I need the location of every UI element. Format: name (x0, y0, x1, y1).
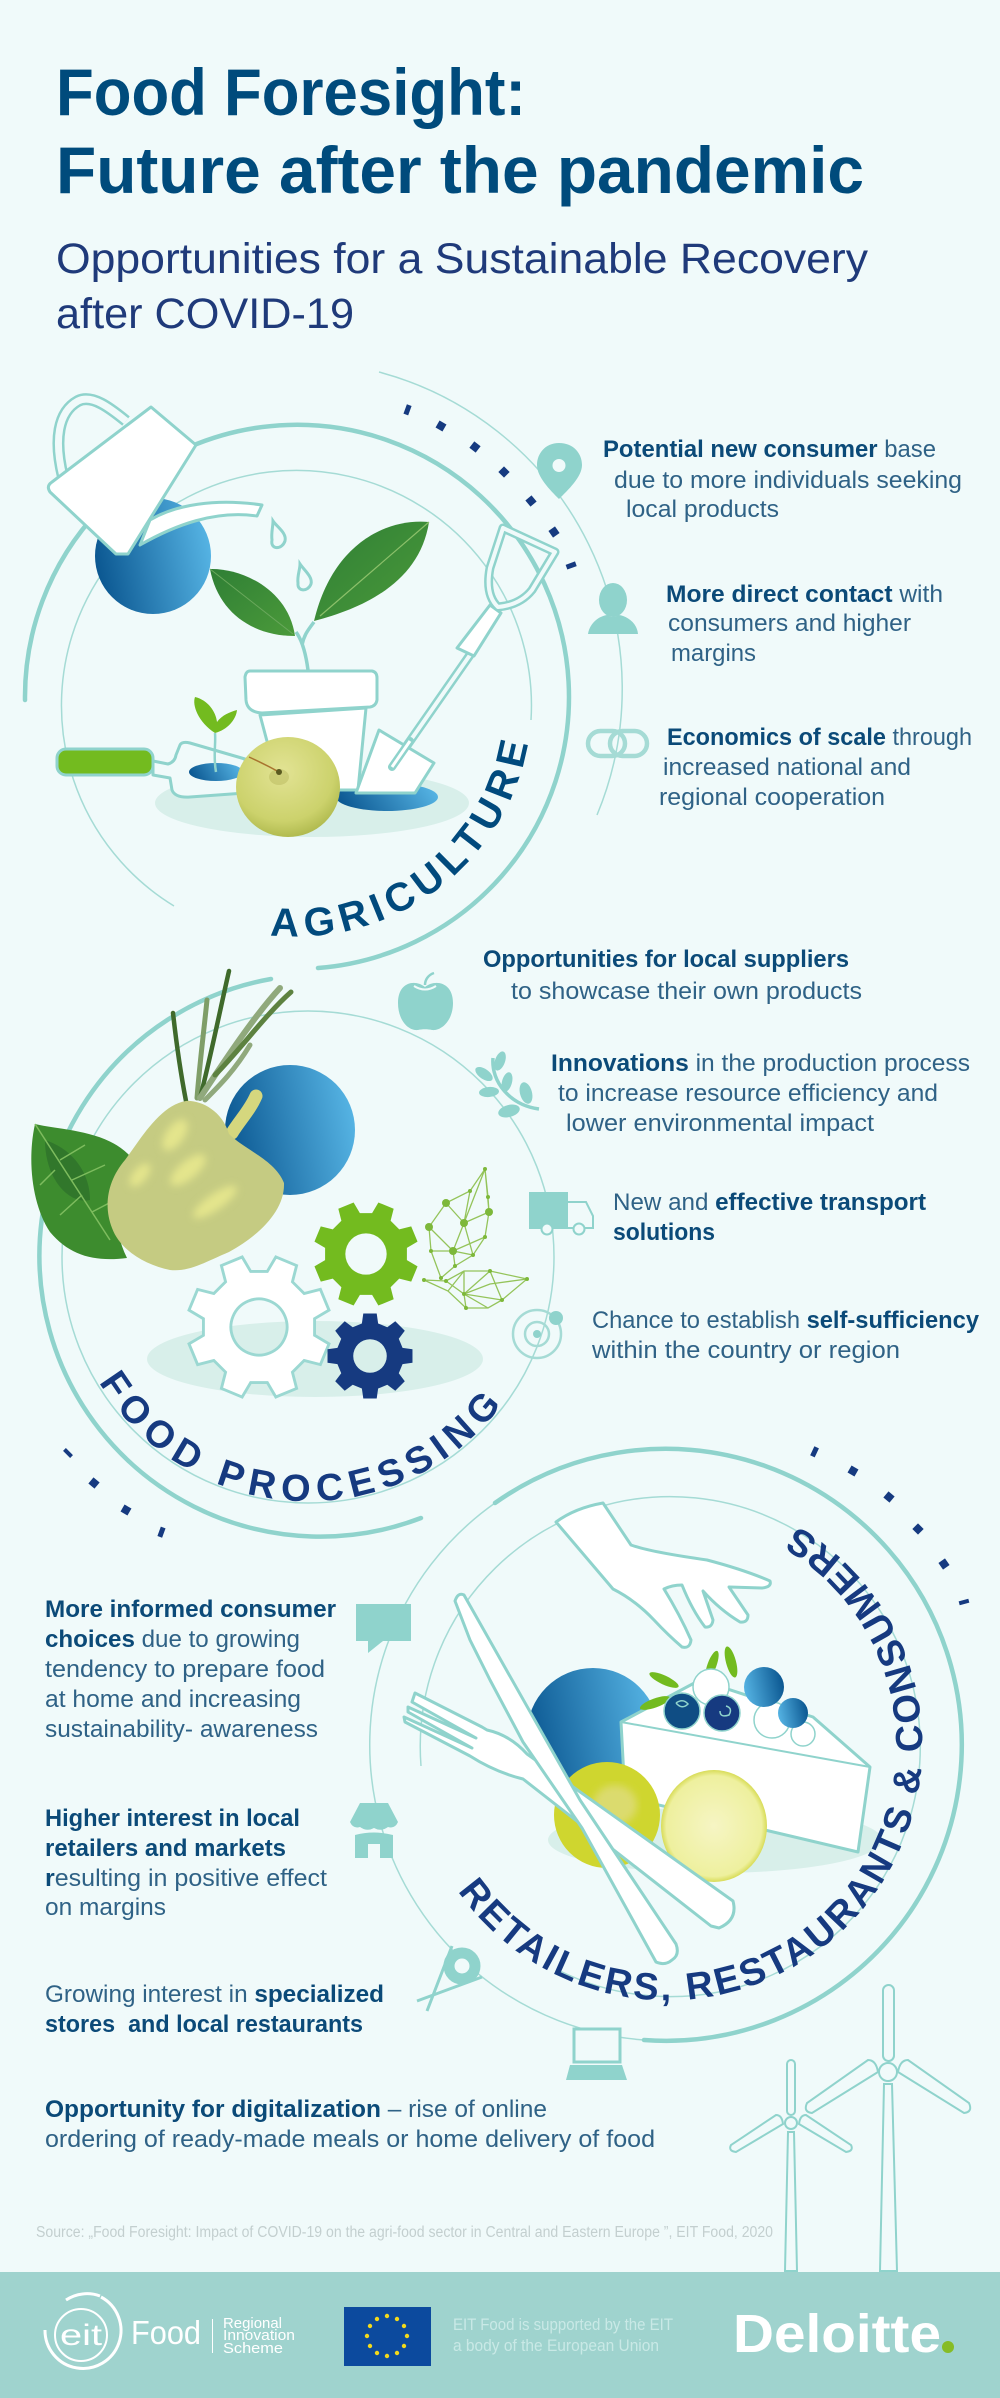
text: local retailers: retailers and markets (45, 1835, 286, 1862)
funding statement: a body of the European Union (453, 2336, 659, 2355)
hand (556, 1503, 770, 1647)
text: innovations: Innovations in the production process (551, 1050, 970, 1077)
text: specialized stores: stores and local restaurants (45, 2011, 363, 2038)
text: economics of scale: Economics of scale through (667, 724, 972, 751)
text: informed consumer choices (45, 1596, 336, 1743)
cake slice (621, 1680, 870, 1852)
text: digitalization: Opportunity for digitalization – rise of online (45, 2096, 547, 2123)
wind turbines (730, 1985, 970, 2271)
text: new consumer base: due to more individuals seeking (614, 467, 962, 494)
text: innovations (551, 1050, 970, 1137)
shadow ellipse (147, 1321, 483, 1397)
icon: person (588, 583, 638, 634)
funding statement (453, 2315, 673, 2355)
text: informed consumer choices: tendency to prepare food (45, 1656, 325, 1683)
footer band (0, 2272, 1000, 2398)
logo: EIT Food: Regional (223, 2315, 282, 2332)
source note: Source: „Food Foresight: Impact of COVID-19 on the agri-food sector in Central and Eastern Europe ”, EIT Food, 2020 (36, 2224, 773, 2241)
digital network leaves (422, 1167, 529, 1310)
text: local retailers: Higher interest in local (45, 1805, 300, 1832)
gears (166, 1186, 434, 1420)
text: direct contact: More direct contact with (666, 581, 943, 608)
logo: EIT Food: eit (60, 2319, 103, 2352)
agriculture dotted arc (403, 404, 577, 570)
heading: agriculture: AGRICULTURE (270, 740, 528, 937)
text: self-sufficiency: within the country or region (591, 1337, 900, 1364)
text: informed consumer choices: More informed consumer (45, 1596, 336, 1623)
title: Future after the pandemic (56, 133, 864, 207)
processing text list (398, 946, 980, 1364)
text: direct contact: consumers and higher (668, 610, 911, 637)
title (56, 55, 864, 207)
retailers rings (370, 1449, 962, 2041)
text: self-sufficiency: Chance to establish self-sufficiency (592, 1307, 980, 1334)
small turbine (730, 2060, 852, 2271)
panel: agriculture (22, 371, 623, 970)
title: Food Foresight: (56, 55, 526, 129)
text: economics of scale: regional cooperation (659, 784, 885, 811)
water drops (272, 521, 311, 590)
agriculture text list (537, 436, 972, 811)
icon: chain link (588, 731, 647, 756)
subtitle: after COVID-19 (56, 290, 354, 338)
trowel with green handle (57, 742, 245, 797)
logo: EIT Food: Scheme (223, 2340, 283, 2357)
retailers text list (45, 1596, 655, 2153)
icon: apple (398, 973, 453, 1030)
logo: EIT Food (45, 2294, 295, 2368)
heading: retailers, restaurants and consumers: RETAILERS, RESTAURANTS & CONSUMERS (459, 1530, 922, 2006)
subtitle: Opportunities for a Sustainable Recovery (56, 235, 869, 283)
text: specialized stores (45, 1981, 384, 2038)
shadow ellipse (548, 1807, 882, 1873)
blue sphere (527, 1668, 659, 1800)
text: self-sufficiency (591, 1307, 980, 1364)
large turbine (806, 1985, 970, 2271)
plant with leaves (210, 522, 429, 670)
text: informed consumer choices: sustainability- awareness (45, 1716, 318, 1743)
text: transport: solutions (613, 1219, 715, 1246)
blue ellipse under sprout (189, 763, 243, 781)
text: local suppliers: Opportunities for local suppliers (483, 946, 849, 973)
text: new consumer base (603, 436, 962, 523)
text: informed consumer choices: at home and increasing (45, 1686, 301, 1713)
blue ellipse under shovel (336, 783, 438, 811)
knife (455, 1594, 677, 1964)
text: economics of scale (659, 724, 972, 811)
leaf photo (31, 1124, 129, 1259)
logo: EIT Food: Food (131, 2314, 201, 2351)
apple photo (236, 737, 340, 837)
processing dotted arc (63, 1448, 166, 1538)
icon: laptop (566, 2029, 627, 2080)
text: specialized stores: Growing interest in specialized (45, 1981, 384, 2008)
text: informed consumer choices: choices due to growing (45, 1626, 300, 1653)
text: local retailers: on margins (45, 1894, 166, 1921)
icon: location pin (537, 443, 582, 499)
sprout (194, 697, 237, 772)
text: new consumer base: local products (626, 496, 779, 523)
panel: food processing (31, 968, 555, 1539)
agriculture rings (25, 372, 622, 968)
retailers dotted arc (810, 1446, 969, 1605)
text: innovations: to increase resource efficiency and (558, 1080, 938, 1107)
shovel (356, 528, 555, 793)
icon: market stall (350, 1803, 398, 1858)
blue circle (225, 1065, 355, 1195)
text: transport (613, 1189, 926, 1246)
icon: target (513, 1310, 563, 1358)
berries and leaves (638, 1645, 815, 1746)
text: direct contact (666, 581, 943, 667)
flower pot (245, 671, 377, 790)
processing rings (39, 979, 554, 1537)
text: transport: New and effective transport (613, 1189, 926, 1216)
logo: EIT Food: Innovation (223, 2327, 295, 2344)
lemons (554, 1762, 767, 1882)
text: local suppliers (483, 946, 862, 1005)
funding statement: EIT Food is supported by the EIT (453, 2315, 673, 2334)
shadow ellipse (155, 769, 469, 837)
fork (404, 1693, 734, 1928)
heading: food processing: FOOD PROCESSING (100, 1370, 498, 1502)
text: new consumer base: Potential new consumer base (603, 436, 936, 463)
subtitle (56, 235, 869, 338)
text: innovations: lower environmental impact (566, 1110, 874, 1137)
rosemary sprigs (173, 971, 291, 1101)
text: direct contact: margins (671, 640, 756, 667)
text: local suppliers: to showcase their own products (511, 978, 862, 1005)
text: local retailers (45, 1805, 327, 1921)
logo: Deloitte: Deloitte (733, 2304, 941, 2364)
text: local retailers: resulting in positive effect (45, 1865, 327, 1892)
icon: leaf branch (473, 1050, 539, 1120)
EU flag (344, 2307, 431, 2366)
pepper photo (108, 1096, 284, 1270)
text: digitalization (45, 2096, 655, 2153)
text: economics of scale: increased national and (663, 754, 911, 781)
blue circle (95, 498, 211, 614)
text: digitalization: ordering of ready-made meals or home delivery of food (45, 2126, 655, 2153)
icon: speech bubble (356, 1604, 411, 1653)
watering can (48, 399, 262, 554)
icon: location ring (417, 1946, 482, 2011)
panel: retailers, restaurants and consumers (369, 1446, 970, 2044)
icon: truck (529, 1192, 593, 1234)
